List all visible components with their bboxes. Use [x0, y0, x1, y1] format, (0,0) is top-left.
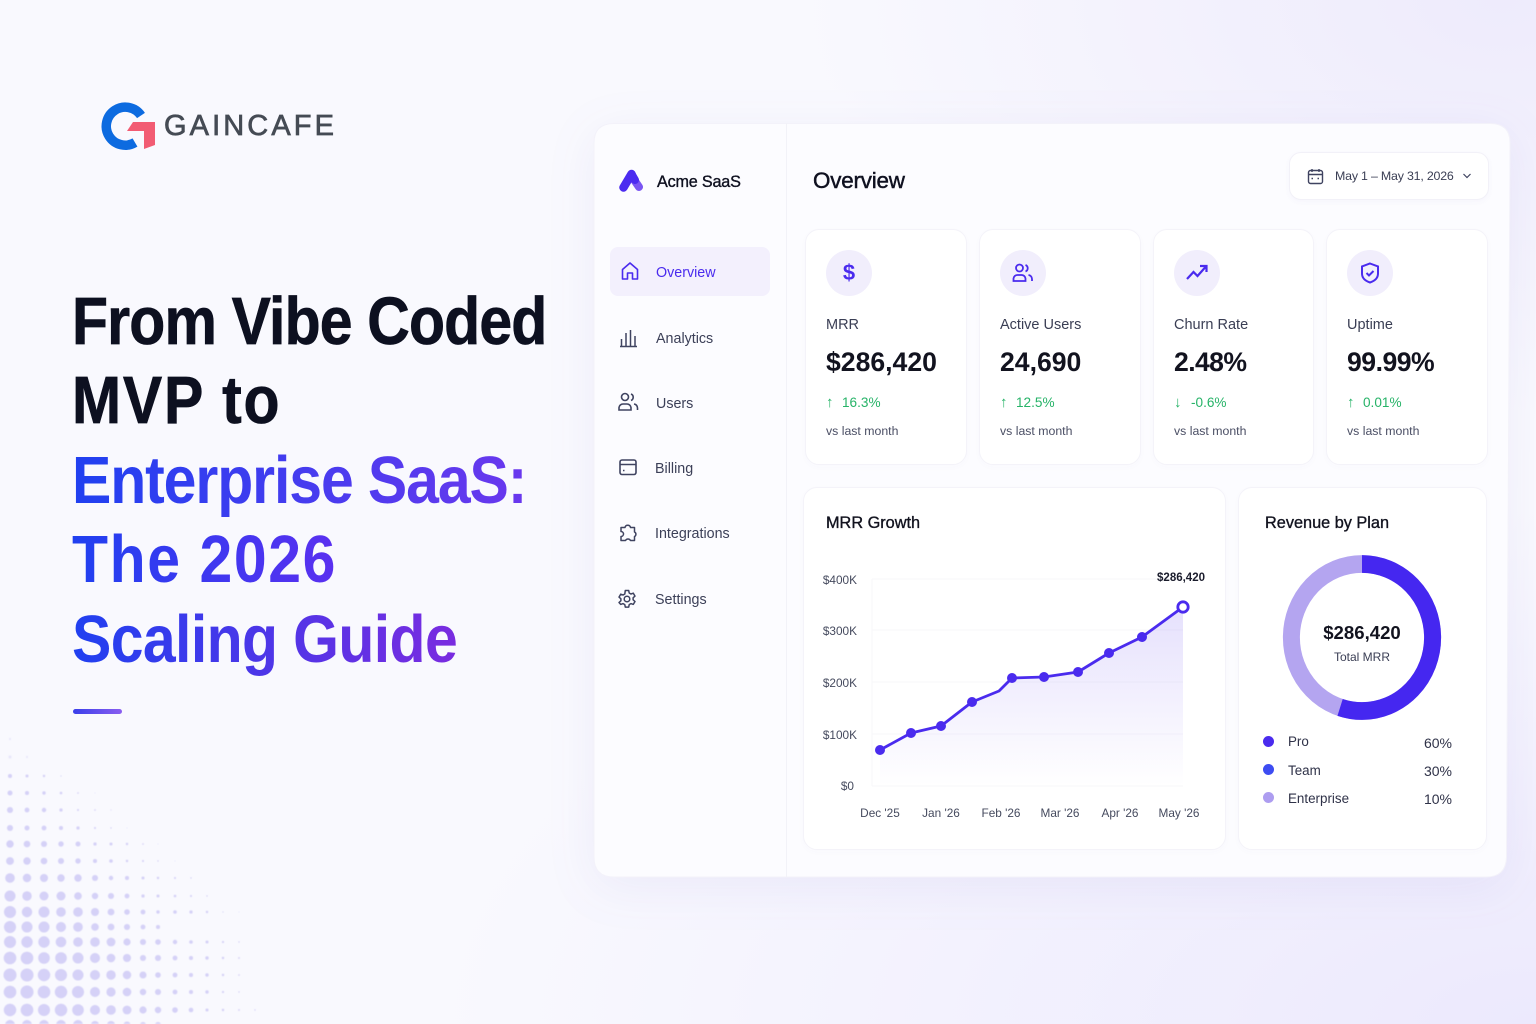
icon: G mark	[102, 102, 155, 150]
label: Churn Rate	[1174, 317, 1248, 333]
label: Users	[656, 396, 693, 412]
icon: card	[619, 459, 637, 476]
donut value: $286,420	[1323, 622, 1401, 643]
icon: Acme logo	[619, 170, 643, 192]
line chart: $286,420	[1157, 572, 1205, 584]
change	[1000, 394, 1055, 411]
name: Pro	[1288, 734, 1309, 749]
brand name: GAINCAFE	[164, 110, 337, 142]
title: MVP to	[72, 363, 281, 438]
heading: Overview: Overview	[813, 168, 905, 193]
accent bar	[73, 709, 122, 714]
icon: trend	[1174, 250, 1220, 296]
icon: puzzle	[620, 524, 637, 542]
line chart: $100K	[823, 728, 857, 742]
KPI card: MRR	[805, 229, 967, 465]
donut label: Total MRR	[1334, 650, 1390, 664]
label: Uptime	[1347, 317, 1393, 333]
line chart: Apr '26	[1101, 806, 1139, 820]
nav item: Overview active	[610, 247, 770, 296]
line chart: $300K	[823, 624, 857, 638]
change: ↑	[826, 394, 834, 411]
label: Active Users	[1000, 317, 1081, 333]
legend: Pro	[1263, 734, 1452, 751]
nav item: Settings	[618, 590, 707, 608]
nav item: Analytics	[620, 330, 713, 348]
note: vs last month	[1174, 424, 1246, 438]
title: Scaling Guide	[72, 602, 457, 677]
icon: gear	[618, 590, 636, 608]
change: 12.5%	[1016, 395, 1055, 410]
panel: Revenue by Plan	[1238, 487, 1487, 850]
panel: dashboard	[610, 124, 1510, 879]
logo: GainCafe	[102, 102, 337, 150]
change: ↑	[1347, 394, 1354, 411]
line chart: $0	[841, 779, 854, 793]
legend: Enterprise	[1263, 791, 1452, 807]
nav item: Billing	[619, 459, 693, 477]
title: The 2026	[72, 522, 337, 597]
percent: 10%	[1424, 791, 1452, 807]
icon: chevron	[1463, 174, 1471, 178]
icon: home	[622, 262, 638, 280]
value: 99.99%	[1347, 347, 1434, 377]
label: MRR	[826, 317, 859, 333]
change: ↓	[1174, 394, 1182, 411]
name: Team	[1288, 763, 1321, 778]
label: Analytics	[656, 331, 713, 347]
KPI card: Churn Rate	[1153, 229, 1314, 465]
label: Settings	[655, 592, 707, 608]
sidebar divider	[786, 123, 787, 877]
value: 2.48%	[1174, 347, 1246, 377]
heading: Revenue by Plan	[1265, 514, 1389, 532]
change: 16.3%	[842, 395, 881, 410]
icon: bars	[620, 330, 637, 348]
title: Enterprise SaaS:	[72, 443, 526, 518]
icon: users	[1000, 250, 1046, 296]
percent: 30%	[1424, 763, 1452, 779]
note: vs last month	[1347, 424, 1419, 438]
date text: May 1 – May 31, 2026	[1335, 169, 1454, 183]
icon: dollar	[826, 250, 872, 296]
line chart: Mar '26	[1041, 806, 1080, 820]
line chart: Feb '26	[982, 806, 1021, 820]
change: -0.6%	[1191, 395, 1227, 410]
value: $286,420	[826, 347, 937, 377]
date picker	[1289, 152, 1489, 200]
name: Enterprise	[1288, 791, 1349, 806]
label: Integrations	[655, 526, 730, 542]
line chart: Jan '26	[922, 806, 960, 820]
title: From Vibe Coded	[72, 284, 546, 359]
label: Billing	[655, 461, 693, 477]
swatch	[1263, 736, 1274, 747]
icon: users	[618, 392, 638, 411]
swatch	[1263, 764, 1274, 775]
line chart: Dec '25	[860, 806, 900, 820]
change	[1174, 394, 1227, 411]
donut chart	[1282, 555, 1442, 720]
nav item: Users	[618, 392, 693, 412]
nav item: Integrations	[620, 524, 730, 542]
icon: dollar: $	[843, 260, 855, 285]
halftone dot pattern	[3, 738, 256, 1024]
KPI card: Active Users	[979, 229, 1141, 465]
heading: MRR Growth	[826, 514, 920, 532]
title	[72, 284, 546, 677]
note: vs last month	[826, 424, 898, 438]
line chart: May '26	[1159, 806, 1200, 820]
change	[826, 394, 881, 411]
panel background	[637, 124, 1510, 879]
panel: MRR Growth chart	[803, 487, 1226, 850]
value: 24,690	[1000, 347, 1081, 377]
change	[1347, 394, 1402, 411]
brand text: Acme SaaS	[657, 173, 741, 191]
note: vs last month	[1000, 424, 1072, 438]
icon: calendar	[1308, 169, 1324, 184]
change: ↑	[1000, 394, 1008, 411]
percent: 60%	[1424, 735, 1452, 751]
sidebar brand: Acme SaaS	[619, 170, 741, 192]
label: Overview	[656, 265, 716, 281]
swatch	[1263, 792, 1274, 803]
change: 0.01%	[1363, 395, 1402, 410]
line chart: $400K	[823, 573, 857, 587]
KPI card: Uptime	[1326, 229, 1488, 465]
line chart	[823, 572, 1205, 820]
icon: shield	[1347, 250, 1393, 296]
legend: Team	[1263, 763, 1452, 779]
line chart: $200K	[823, 676, 857, 690]
